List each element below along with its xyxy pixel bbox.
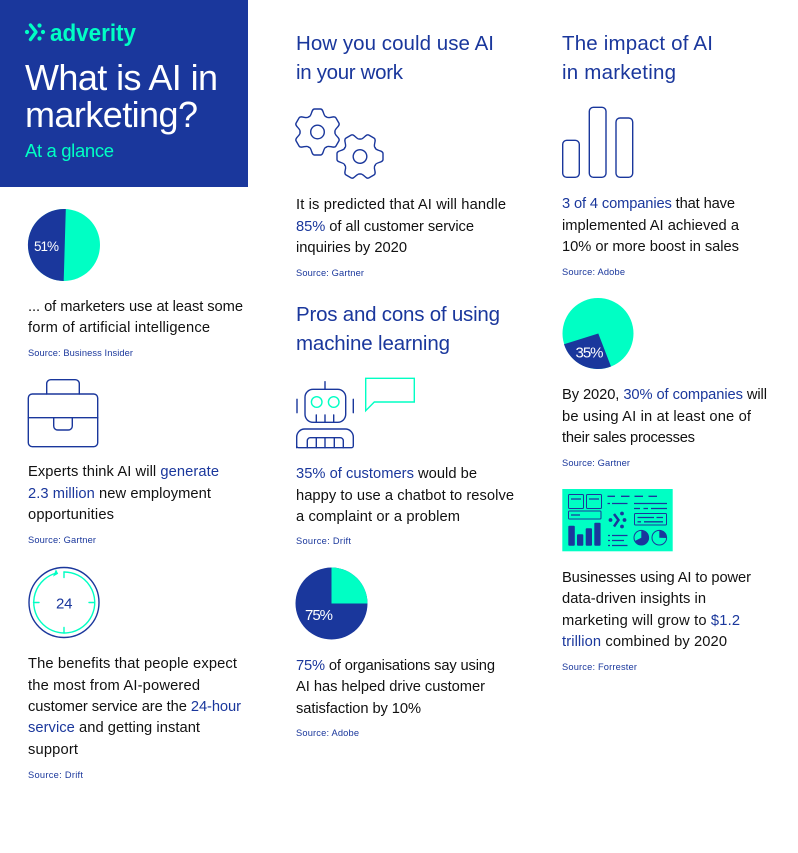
icon: dashboard xyxy=(562,489,673,551)
source: Source: Drift xyxy=(28,770,83,780)
robot xyxy=(297,382,353,448)
text: opportunities xyxy=(28,507,114,523)
title: What is AI in xyxy=(25,57,218,98)
text xyxy=(296,466,514,525)
pie chart: 75% xyxy=(296,568,368,640)
section heading: the impact of AI: The impact of AI xyxy=(562,32,713,55)
source: Source: Business Insider xyxy=(28,348,133,358)
text: It is predicted that AI will handle xyxy=(296,197,506,213)
stat: data-driven insights xyxy=(562,489,751,672)
text xyxy=(562,196,740,255)
text xyxy=(296,197,506,256)
stat: chatbot xyxy=(296,378,514,546)
source: Source: Drift xyxy=(296,536,351,546)
text: 35% of customers would be xyxy=(296,466,477,482)
stat: 51% of marketers xyxy=(28,209,243,358)
pie chart: 35% xyxy=(562,298,634,369)
logo mark xyxy=(25,23,45,41)
source: Source: Gartner xyxy=(562,458,630,468)
section heading: how you could use AI: How you could use AI xyxy=(296,32,494,55)
text xyxy=(28,299,243,336)
text: 10% or more boost in sales xyxy=(562,239,739,255)
text: ... of marketers use at least some xyxy=(28,299,243,315)
stat: 24-hour service xyxy=(28,568,241,780)
text: Experts think AI will generate xyxy=(28,464,219,480)
source: Source: Adobe xyxy=(562,267,625,277)
speech bubble xyxy=(366,378,414,411)
subtitle: At a glance xyxy=(25,140,114,161)
stat: employment xyxy=(28,380,219,545)
icon: robot with speech bubble xyxy=(297,378,414,448)
text: trillion combined by 2020 xyxy=(562,634,727,650)
icon: gears xyxy=(293,109,393,189)
text: AI has helped drive customer xyxy=(296,679,485,695)
text: 75% of organisations say using xyxy=(296,658,495,674)
text: The benefits that people expect xyxy=(28,656,237,672)
text xyxy=(28,656,241,758)
source: Source: Adobe xyxy=(296,728,359,738)
text: support xyxy=(28,742,78,758)
section heading: how you could use AI xyxy=(296,32,494,84)
text: 3 of 4 companies that have xyxy=(562,196,735,212)
text: customer service are the 24-hour xyxy=(28,699,241,715)
section heading: pros and cons xyxy=(296,303,500,355)
text xyxy=(562,570,751,650)
text: their sales processes xyxy=(562,430,695,446)
text: happy to use a chatbot to resolve xyxy=(296,488,514,504)
stat: customer satisfaction xyxy=(296,568,495,738)
section heading: how you could use AI: in your work xyxy=(296,61,404,84)
text: service and getting instant xyxy=(28,720,200,736)
text: inquiries by 2020 xyxy=(296,240,407,256)
pie chart: 51%: 51% xyxy=(34,239,59,254)
text xyxy=(562,387,767,446)
section heading: the impact of AI: in marketing xyxy=(562,61,676,84)
header panel xyxy=(0,0,248,187)
section heading: pros and cons: machine learning xyxy=(296,332,450,355)
source: Source: Forrester xyxy=(562,662,637,672)
text: implemented AI achieved a xyxy=(562,218,740,234)
text xyxy=(28,464,219,523)
text: By 2020, 30% of companies will xyxy=(562,387,767,403)
text xyxy=(296,658,495,717)
icon: 24 hour clock xyxy=(29,568,99,638)
stat: sales boost xyxy=(562,107,740,277)
text: data-driven insights in xyxy=(562,591,706,607)
title: marketing? xyxy=(25,94,198,135)
source: Source: Gartner xyxy=(28,535,96,545)
pie chart: 51% xyxy=(28,209,100,281)
icon: bar outlines xyxy=(563,107,633,177)
text: satisfaction by 10% xyxy=(296,701,421,717)
title xyxy=(25,57,218,135)
text: Businesses using AI to power xyxy=(562,570,751,586)
icon: briefcase xyxy=(28,380,98,447)
section heading: the impact of AI xyxy=(562,32,713,84)
text: form of artificial intelligence xyxy=(28,320,210,336)
source: Source: Gartner xyxy=(296,268,364,278)
text: the most from AI-powered xyxy=(28,678,200,694)
pie chart: 75%: 75% xyxy=(305,607,333,624)
logo: adverity xyxy=(50,20,137,47)
text: 85% of all customer service xyxy=(296,219,474,235)
icon: 24 hour clock: 24 xyxy=(56,596,72,612)
text: marketing will grow to $1.2 xyxy=(562,613,740,629)
pie chart: 35%: 35% xyxy=(576,344,604,362)
text: 2.3 million new employment xyxy=(28,486,211,502)
text: a complaint or a problem xyxy=(296,509,460,525)
stat: sales processes xyxy=(562,298,767,468)
text: be using AI in at least one of xyxy=(562,409,752,425)
stat: customer service xyxy=(293,109,506,278)
section heading: pros and cons: Pros and cons of using xyxy=(296,303,500,326)
